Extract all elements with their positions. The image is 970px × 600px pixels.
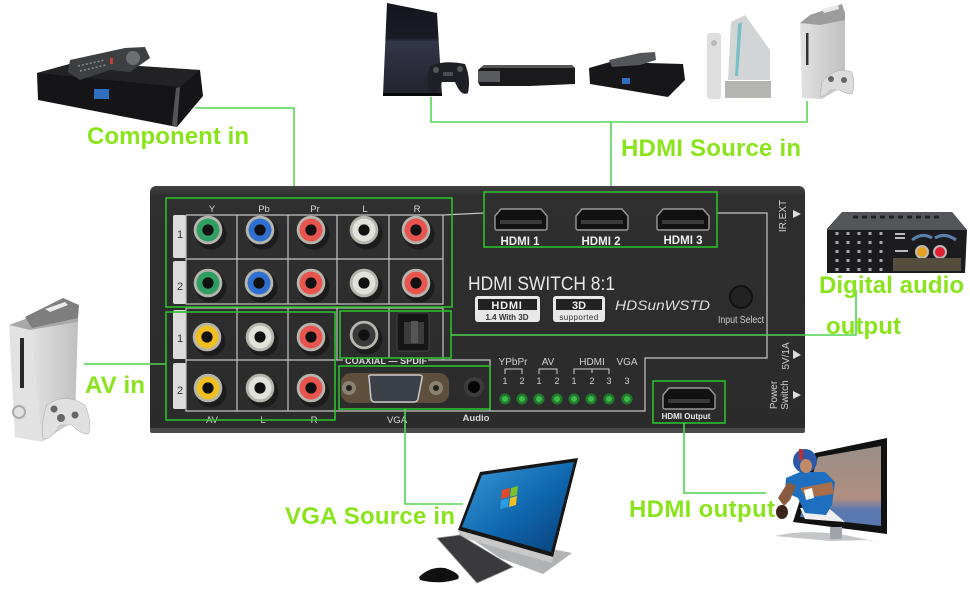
side labels and arrows: 5V/1A (781, 342, 792, 370)
VGA connector (341, 373, 449, 403)
component column labels: Pb (258, 204, 270, 215)
HDMI input labels (501, 235, 702, 248)
coaxial jack (350, 321, 382, 354)
highlight: component input box (166, 198, 452, 307)
label: HDMI Source in: HDMI Source in (621, 135, 801, 162)
HDMI output port (662, 388, 715, 421)
badge: 3D supported: 3D (572, 300, 586, 312)
LED group labels (499, 357, 638, 386)
icon: Xbox 360 console with controller (HDMI) (800, 4, 854, 99)
product name: HDMI SWITCH 8:1 (468, 274, 615, 295)
LED group labels: AV (542, 357, 555, 368)
LED group labels: 3 (606, 376, 612, 386)
icon: Xbox 360 console with controller (AV) (9, 298, 90, 442)
LED group labels: 2 (554, 376, 560, 386)
icon: television with football player (775, 438, 887, 545)
row numbers: 2 (177, 385, 183, 397)
icon: amplifier (827, 212, 967, 273)
icon: PS4 console with controller (383, 3, 469, 96)
label: output: output (826, 313, 901, 340)
row numbers: 1 (177, 333, 183, 345)
component column labels: L (362, 204, 368, 215)
LED group labels: HDMI (579, 357, 605, 368)
AV input jacks (193, 323, 330, 408)
component column labels: Pr (310, 204, 320, 215)
highlight: VGA input box (339, 366, 490, 409)
HDMI output port: HDMI Output (662, 412, 711, 421)
label: HDMI output: HDMI output (629, 496, 775, 523)
connector: HDMI source bus line (431, 97, 807, 192)
VGA and Audio labels: Audio (463, 413, 490, 424)
panel: HDMI switch rear panel (150, 186, 805, 433)
label: VGA Source in: VGA Source in (285, 503, 455, 530)
AV column labels: L (260, 415, 266, 426)
label: AV in: AV in (85, 372, 145, 399)
connector: AV line (84, 363, 166, 365)
LED group labels: 2 (589, 376, 595, 386)
AV column labels (206, 415, 318, 426)
icon: set-top box with remote (component source) (37, 47, 203, 127)
AV column labels: AV (206, 415, 219, 426)
highlight: digital audio box (340, 311, 451, 358)
badge: HDMI 1.4 with 3D: 1.4 With 3D (485, 313, 529, 322)
badge: 3D supported (553, 296, 605, 322)
row numbers: 2 (177, 281, 183, 293)
icon: all-in-one PC with keyboard and mouse (419, 458, 578, 583)
component input jacks (194, 216, 434, 302)
audio jack (464, 377, 484, 397)
status LEDs (500, 394, 632, 404)
optical SPDIF port (397, 313, 429, 351)
badge: HDMI 1.4 with 3D: HDMI (491, 300, 523, 312)
connector: VGA line (405, 409, 463, 504)
coaxial and SPDIF labels: COAXIAL — SPDIF (345, 356, 428, 366)
LED group labels: YPbPr (499, 357, 528, 368)
LED group labels: 1 (502, 376, 508, 386)
AV column labels: R (311, 415, 318, 426)
brand logo text: HDSunWSTD (615, 297, 710, 313)
LED group labels: 2 (519, 376, 525, 386)
HDMI input ports (495, 209, 709, 230)
side labels and arrows: Switch (780, 380, 791, 410)
row numbers (177, 229, 183, 397)
component column labels: Y (209, 204, 216, 215)
highlight: HDMI input box (484, 192, 717, 247)
badge: HDMI 1.4 with 3D (475, 296, 540, 322)
LED group labels: 3 (624, 376, 630, 386)
highlight: AV input box (166, 312, 335, 420)
side labels and arrows: IR.EXT (778, 200, 789, 232)
icon: small set-top box with remote (589, 52, 685, 97)
icon: Blu-ray player (478, 65, 575, 86)
label: Digital audio: Digital audio (819, 272, 964, 299)
HDMI input labels: HDMI 2 (582, 236, 620, 248)
icon: Wii console and remote (707, 15, 771, 99)
LED group labels: VGA (616, 357, 638, 368)
side labels and arrows (769, 200, 801, 410)
HDMI input labels: HDMI 3 (664, 235, 702, 247)
connector: digital audio line (451, 290, 856, 335)
component and AV jack tabs (173, 215, 186, 409)
badge: 3D supported: supported (559, 313, 599, 322)
connector: HDMI output line (684, 423, 766, 493)
LED group labels: 1 (536, 376, 542, 386)
LED group brackets (505, 369, 609, 374)
jack table grid lines (186, 213, 767, 411)
highlight: HDMI output box (653, 381, 725, 423)
HDMI input labels: HDMI 1 (501, 236, 540, 248)
side labels and arrows: Power (769, 380, 780, 409)
component column labels: R (414, 204, 421, 215)
VGA and Audio labels: VGA (387, 415, 408, 426)
label: Component in: Component in (87, 123, 249, 150)
component column labels (209, 204, 421, 215)
LED group labels: 1 (571, 376, 577, 386)
row numbers: 1 (177, 229, 183, 241)
input select button (718, 286, 764, 326)
input select button: Input Select (718, 315, 764, 326)
VGA and Audio labels (387, 413, 490, 426)
connector: component source line (195, 108, 294, 198)
